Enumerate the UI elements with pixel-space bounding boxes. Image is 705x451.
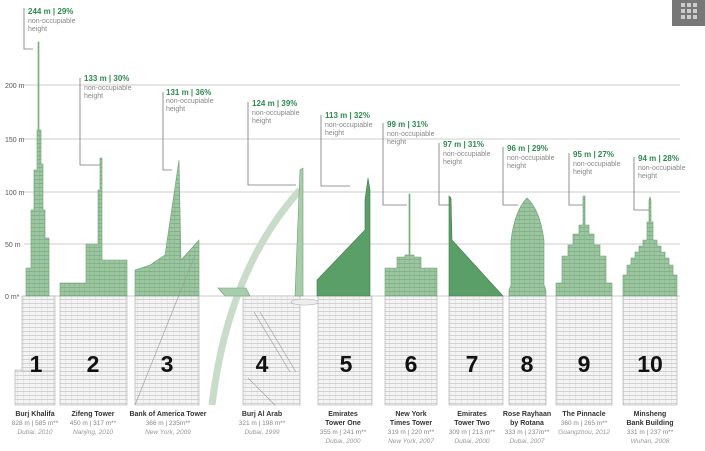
building name labels: Guangzhou, 2012 [558,429,610,436]
axis: height scale: 100 m [5,190,25,197]
callouts: non-occupiable height: non-occupiable [638,165,686,172]
building 6: New York Times: 6 [405,351,417,377]
callouts: non-occupiable height: 95 m | 27% [573,150,614,159]
building name labels: New York, 2009 [145,429,191,436]
building name labels: Emirates [457,411,487,418]
building 5: Emirates Tower One [317,178,372,405]
axis: height scale: 0 m* [5,294,20,301]
building 9: The Pinnacle [556,196,612,405]
callouts: non-occupiable height: height [252,118,271,125]
building 3: Bank of America [135,160,199,405]
building 8: Rose Rayhaan [509,198,546,405]
callouts: non-occupiable height: 97 m | 31% [443,140,484,149]
building 5: Emirates Tower One: 5 [340,351,353,377]
building 2: Zifeng Tower: 2 [87,351,99,377]
building name labels: 355 m | 241 m** [320,429,367,436]
callouts: non-occupiable height: 99 m | 31% [387,120,428,129]
building name labels: Dubai, 2000 [454,438,490,445]
building 8: Rose Rayhaan: 8 [521,351,534,377]
building name labels: 321 m | 198 m** [239,420,286,427]
building 2: Zifeng Tower [60,158,127,405]
building name labels: Dubai, 2010 [17,429,53,436]
icon: grid menu [672,0,705,26]
callouts: non-occupiable height: non-occupiable [166,98,214,105]
callouts: non-occupiable height: 96 m | 29% [507,144,548,153]
building name labels: 319 m | 220 m** [388,429,435,436]
building 10: Minsheng Bank: 10 [637,351,663,377]
callouts: non-occupiable height: non-occupiable [252,110,300,117]
callouts: non-occupiable height: non-occupiable [84,85,132,92]
building name labels: Times Tower [390,420,432,427]
axis: height scale: 150 m [5,137,25,144]
callouts: non-occupiable height: height [573,169,592,176]
axis: height scale [5,83,680,301]
callouts: non-occupiable height: non-occupiable [28,18,76,25]
building name labels: 331 m | 237 m** [627,429,674,436]
building name labels: Tower One [325,420,361,427]
building 10: Minsheng Bank [623,197,677,405]
building name labels: by Rotana [510,420,544,427]
building 3: Bank of America: 3 [161,351,173,377]
building name labels: 828 m | 585 m** [12,420,59,427]
callouts: non-occupiable height: 113 m | 32% [325,111,370,120]
axis: height scale: 50 m [5,242,21,249]
callouts: non-occupiable height: height [325,130,344,137]
callouts: non-occupiable height: non-occupiable [573,161,621,168]
building name labels: 309 m | 213 m** [449,429,496,436]
axis: height scale: 200 m [5,83,25,90]
callouts: non-occupiable height: non-occupiable [507,155,555,162]
building name labels: 450 m | 317 m** [70,420,117,427]
building 7: Emirates Tower Two: 7 [466,351,478,377]
building name labels: Bank of America Tower [129,411,207,418]
building name labels: 333 m | 237m** [505,429,550,436]
callouts: non-occupiable height: height [166,106,185,113]
callouts: non-occupiable height: non-occupiable [387,131,435,138]
callouts: non-occupiable height: height [638,173,657,180]
callouts: non-occupiable height: 131 m | 36% [166,88,211,97]
building name labels: Tower Two [454,420,490,427]
building name labels: Rose Rayhaan [503,411,551,418]
building name labels: Dubai, 2000 [325,438,361,445]
building 1: Burj Khalifa [15,42,55,405]
building name labels: Bank Building [626,420,674,427]
callouts: non-occupiable height: 124 m | 39% [252,99,297,108]
building name labels: 366 m | 235m** [146,420,191,427]
building 4: Burj Al Arab [212,168,319,405]
callouts: non-occupiable height: height [507,163,526,170]
callouts: non-occupiable height: 133 m | 30% [84,74,129,83]
callouts: non-occupiable height: non-occupiable [325,122,373,129]
building name labels: The Pinnacle [562,411,606,418]
building name labels: Emirates [328,411,358,418]
callouts: non-occupiable height: height [84,93,103,100]
building name labels: Burj Al Arab [242,411,282,418]
callouts: non-occupiable height: 94 m | 28% [638,154,679,163]
callouts: non-occupiable height [24,7,686,210]
building 4: Burj Al Arab: 4 [256,351,269,377]
building name labels: Dubai, 2007 [509,438,545,445]
building name labels [12,411,674,445]
callouts: non-occupiable height: 244 m | 29% [28,7,73,16]
building name labels: Minsheng [634,411,666,418]
building name labels: Burj Khalifa [15,411,55,418]
callouts: non-occupiable height: non-occupiable [443,151,491,158]
building name labels: Zifeng Tower [71,411,115,418]
callouts: non-occupiable height: height [387,139,406,146]
building name labels: New York, 2007 [388,438,434,445]
building 7: Emirates Tower Two [449,196,503,405]
building name labels: 360 m | 265 m** [561,420,608,427]
building name labels: Dubai, 1999 [244,429,280,436]
callouts: non-occupiable height: height [443,159,462,166]
building 1: Burj Khalifa: 1 [30,351,43,377]
building name labels: Wuhan, 2008 [631,438,670,445]
building name labels: New York [395,411,427,418]
building 9: The Pinnacle: 9 [578,351,590,377]
building name labels: Nanjing, 2010 [73,429,113,436]
callouts: non-occupiable height: height [28,26,47,33]
building 6: New York Times [385,194,437,405]
